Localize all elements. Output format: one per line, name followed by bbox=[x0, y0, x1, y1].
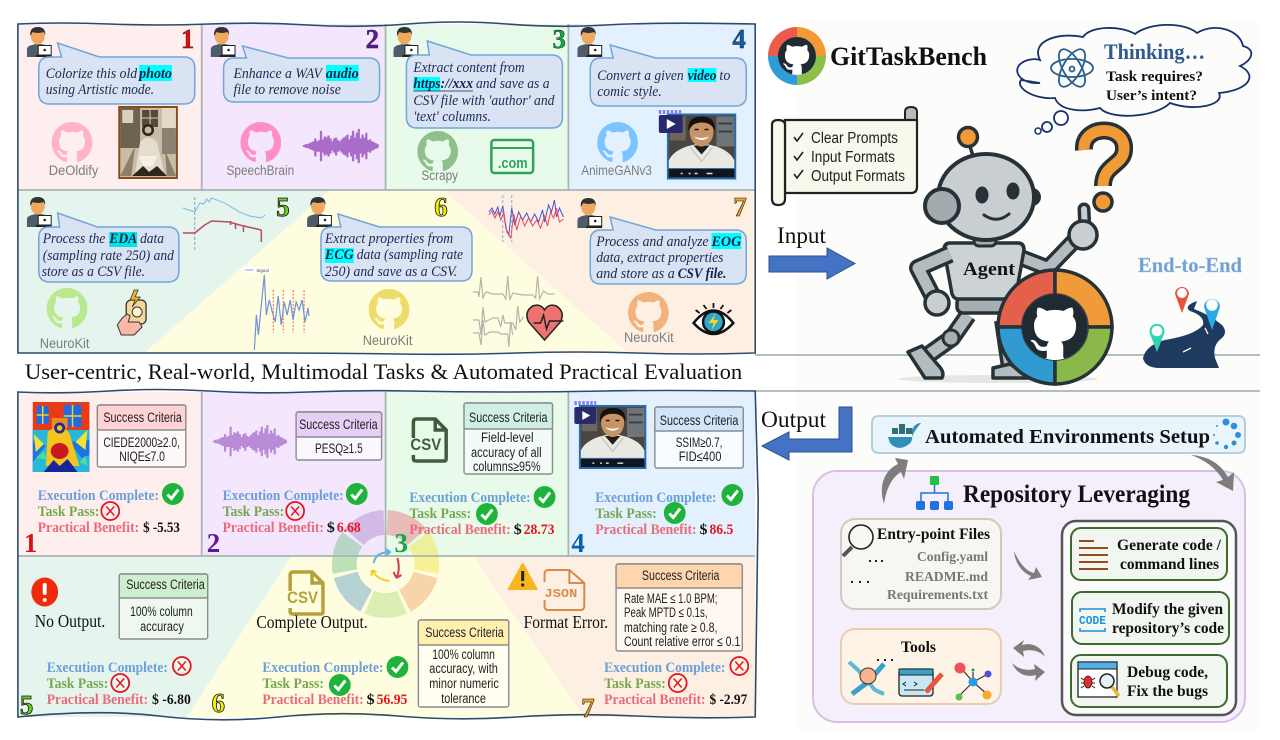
thought cloud bbox=[1017, 25, 1251, 134]
prompt bubble 4: Convert a given bbox=[597, 68, 684, 84]
number 7: 7 bbox=[581, 693, 595, 723]
prompt bubble 4 bbox=[590, 45, 746, 106]
number 5: 5 bbox=[276, 192, 290, 222]
success criteria box 6: accuracy, with bbox=[429, 661, 498, 676]
task 1 bbox=[27, 24, 195, 178]
prompt bubble 7: Process and analyze bbox=[595, 234, 709, 250]
success criteria box 6: 100% column bbox=[432, 647, 495, 662]
prompt bubble 1 bbox=[39, 43, 195, 104]
prompt bubble 5: (sampling rate 250) and bbox=[43, 248, 175, 264]
prompt bubble 3: https://xxx bbox=[413, 76, 473, 92]
scroll: prompt checklist bbox=[772, 107, 917, 205]
status lines 6: $ bbox=[367, 692, 375, 708]
success criteria box 1: NIQE≤7.0 bbox=[119, 449, 165, 464]
status lines 4 bbox=[595, 484, 743, 538]
output label: Output bbox=[761, 407, 827, 432]
end-to-end label: End-to-End bbox=[1138, 253, 1242, 277]
signal chart: Signal bbox=[256, 268, 269, 273]
prompt bubble 6 bbox=[321, 214, 472, 281]
result 5 bbox=[20, 574, 208, 720]
border bbox=[18, 390, 758, 720]
horizontal rule bbox=[755, 390, 1260, 392]
EDA chart bbox=[183, 197, 265, 252]
repo label: DeOldify bbox=[49, 163, 99, 178]
task 5 bbox=[27, 192, 290, 351]
icon: website: .com bbox=[498, 155, 528, 172]
number 4: 4 bbox=[732, 24, 746, 54]
prompt bubble 5: data bbox=[140, 231, 164, 247]
action: modify code: repository’s code bbox=[1112, 620, 1224, 637]
number 1: 1 bbox=[24, 528, 37, 558]
wheel with github logo bbox=[998, 270, 1112, 384]
icon: user bbox=[394, 27, 418, 57]
number 3: 3 bbox=[552, 24, 566, 54]
status lines 1 bbox=[38, 483, 184, 536]
prompt bubble 7 bbox=[590, 217, 746, 284]
status lines 5: Practical Benefit: bbox=[47, 692, 148, 708]
status lines 3: Execution Complete: bbox=[409, 490, 531, 506]
prompt bubble 2: audio bbox=[326, 66, 359, 82]
icon: DeOldify repo bbox=[52, 122, 92, 162]
success criteria box 3: accuracy of all bbox=[471, 445, 542, 460]
success criteria box 7: Success Criteria bbox=[642, 568, 720, 583]
result 6 bbox=[212, 572, 509, 718]
prompt bubble 3: 'text' columns. bbox=[413, 109, 491, 125]
icon: user bbox=[307, 197, 332, 227]
success criteria box 5: Success Criteria bbox=[126, 577, 205, 592]
scroll: prompt checklist: Output Formats bbox=[811, 168, 905, 185]
outcome label: Format Error. bbox=[524, 612, 608, 632]
outcome label: No Output. bbox=[35, 611, 105, 631]
icon: wrench hand bbox=[849, 662, 884, 694]
status lines 3: $ bbox=[514, 522, 522, 538]
success criteria box 3 bbox=[464, 403, 552, 474]
result 3 bbox=[394, 403, 555, 558]
background: right side bbox=[797, 22, 1260, 730]
success criteria box 7: Count relative error ≤ 0.1 bbox=[624, 634, 740, 649]
icon: JSON file bbox=[543, 570, 584, 610]
icon: user bbox=[27, 197, 52, 227]
repo label: AnimeGANv3 bbox=[581, 163, 652, 178]
success criteria box 4: SSIM≥0.7, bbox=[676, 435, 722, 450]
left column: tasks and evaluation bbox=[18, 22, 758, 723]
status lines 6 bbox=[262, 656, 408, 708]
number 2: 2 bbox=[366, 24, 379, 54]
EOG chart bbox=[489, 195, 563, 242]
repo label: Scrapy bbox=[421, 168, 458, 183]
old photo bbox=[119, 107, 177, 178]
action: debug code bbox=[1071, 655, 1227, 707]
status lines 5: Execution Complete: bbox=[47, 660, 168, 676]
input label: Input bbox=[777, 223, 827, 248]
prompt bubble 5: Process the bbox=[42, 231, 106, 247]
prompt bubble 3: Extract content from bbox=[412, 60, 525, 76]
panel: entry-point files: README.md bbox=[905, 570, 988, 585]
success criteria box 2: PESQ≥1.5 bbox=[315, 441, 363, 456]
status lines 4: Execution Complete: bbox=[595, 490, 716, 506]
heading text: Repository Leveraging bbox=[963, 481, 1190, 508]
status lines 4: Task Pass: bbox=[595, 506, 657, 522]
success criteria box 6: Success Criteria bbox=[425, 625, 504, 640]
status lines 6: Practical Benefit: bbox=[262, 692, 364, 708]
scroll: prompt checklist: Clear Prompts bbox=[811, 130, 898, 147]
name: GitTaskBench bbox=[830, 42, 988, 71]
status lines 1: $ -5.53 bbox=[143, 520, 180, 536]
status lines 7: $ -2.97 bbox=[710, 692, 748, 708]
task 3 bbox=[394, 24, 566, 183]
status lines 6: Task Pass: bbox=[262, 676, 324, 692]
prompt bubble 7: CSV file. bbox=[678, 266, 726, 282]
repo label: SpeechBrain bbox=[227, 163, 294, 178]
icon: network bbox=[954, 662, 992, 700]
icon: eye with bolt bbox=[694, 303, 733, 334]
prompt bubble 6: 250) and save as a CSV. bbox=[325, 264, 458, 280]
success criteria box 4: FID≤400 bbox=[679, 449, 721, 464]
panel: tools: Tools bbox=[901, 639, 936, 656]
success criteria box 3: Success Criteria bbox=[469, 410, 548, 425]
icon: website bbox=[491, 140, 533, 173]
panel: repository leveraging bbox=[813, 471, 1245, 722]
outcome label: Complete Output. bbox=[256, 612, 368, 632]
panel: entry-point files bbox=[841, 519, 1001, 609]
number 7: 7 bbox=[733, 192, 747, 222]
icon: Scrapy repo bbox=[417, 131, 458, 171]
action: debug code: Fix the bugs bbox=[1127, 683, 1208, 700]
status lines 4: Practical Benefit: bbox=[595, 522, 697, 538]
prompt bubble 2: Enhance a WAV bbox=[233, 66, 324, 82]
success criteria box 7: matching rate ≥ 0.8, bbox=[624, 620, 717, 635]
task 2 bbox=[211, 24, 380, 178]
status lines 5: Task Pass: bbox=[47, 676, 108, 692]
logo and project name bbox=[768, 27, 988, 85]
icon: SpeechBrain repo bbox=[240, 122, 281, 162]
icon: user bbox=[577, 27, 602, 57]
status lines 4: $ bbox=[700, 522, 708, 538]
icon: code window bbox=[899, 669, 942, 696]
status lines 3: Task Pass: bbox=[409, 506, 471, 522]
evaluation dividers bbox=[18, 392, 755, 556]
prompt bubble 5: EDA bbox=[108, 231, 137, 247]
status lines 3 bbox=[409, 486, 555, 538]
prompt bubble 5 bbox=[39, 213, 179, 282]
status lines 7: Practical Benefit: bbox=[604, 692, 706, 708]
success criteria box 4: Success Criteria bbox=[660, 413, 739, 428]
status lines 5 bbox=[47, 657, 191, 708]
panel: agent actions bbox=[1062, 521, 1236, 715]
action: modify code: Modify the given bbox=[1112, 601, 1223, 618]
status lines 2: Execution Complete: bbox=[223, 488, 344, 504]
question mark bbox=[1084, 130, 1124, 211]
success criteria box 1: CIEDE2000≥2.0, bbox=[103, 435, 180, 450]
icon: user bbox=[211, 27, 236, 57]
neck bbox=[974, 236, 996, 246]
prompt bubble 3: and save as a bbox=[476, 76, 550, 92]
prompt bubble 7: EOG bbox=[711, 234, 742, 250]
input video bbox=[659, 112, 736, 180]
repo label: NeuroKit bbox=[40, 336, 90, 351]
number 3: 3 bbox=[394, 528, 408, 558]
icon: docker whale bbox=[888, 423, 921, 448]
panel: evaluation bbox=[18, 392, 755, 717]
success criteria box 6 bbox=[418, 620, 509, 707]
horizontal rule bbox=[755, 354, 1260, 356]
action: modify code bbox=[1072, 592, 1229, 644]
status lines 5: $ -6.80 bbox=[152, 692, 191, 708]
success criteria box 6: tolerance bbox=[441, 691, 486, 706]
success criteria box 1 bbox=[97, 405, 186, 467]
signal chart bbox=[243, 267, 309, 350]
prompt bubble 7: data, extract properties bbox=[596, 250, 724, 266]
status lines 2: Practical Benefit: bbox=[223, 520, 324, 536]
number 1: 1 bbox=[181, 24, 194, 54]
thinking text: Thinking… bbox=[1104, 39, 1205, 64]
number 5: 5 bbox=[20, 690, 33, 720]
thought cloud: User’s intent? bbox=[1106, 88, 1197, 104]
legs bbox=[908, 315, 1030, 378]
success criteria box 7: Peak MPTD ≤ 0.1s, bbox=[624, 605, 708, 620]
arrow: input bbox=[769, 248, 855, 279]
success criteria box 2: Success Criteria bbox=[299, 417, 378, 432]
left arm bbox=[918, 254, 950, 315]
number 2: 2 bbox=[207, 528, 220, 558]
prompt bubble 5: store as a CSV file. bbox=[42, 264, 145, 280]
icon: CSV file bbox=[410, 419, 446, 461]
panel: tools bbox=[841, 629, 1001, 704]
status lines 2: Task Pass: bbox=[223, 504, 284, 520]
waist bbox=[957, 297, 1007, 313]
number 6: 6 bbox=[212, 688, 225, 718]
prompt bubble 3: CSV file with 'author' and bbox=[413, 93, 555, 109]
task 7 bbox=[489, 192, 747, 345]
panel: entry-point files: Config.yaml bbox=[917, 550, 988, 565]
agent label: Agent bbox=[963, 259, 1016, 280]
scroll: prompt checklist: Input Formats bbox=[811, 149, 895, 166]
number 6: 6 bbox=[434, 192, 448, 222]
prompt bubble 2 bbox=[224, 46, 380, 102]
status lines 7 bbox=[604, 657, 748, 708]
action: debug code: Debug code, bbox=[1127, 664, 1208, 681]
icon: magnifier bbox=[843, 525, 873, 556]
status lines 3: Practical Benefit: bbox=[409, 522, 511, 538]
icon: NeuroKit repo bbox=[369, 289, 409, 329]
icon: heart bbox=[527, 305, 563, 340]
result 2 bbox=[207, 412, 382, 558]
icon: JSON file: JSON bbox=[545, 587, 577, 601]
icon: user bbox=[577, 198, 602, 228]
icon: sync arrows bbox=[1012, 640, 1045, 681]
prompt bubble 6: ECG bbox=[324, 247, 354, 263]
title: section heading: User-centric, Real-world, Multimodal Tasks & Automated Practical Evaluation bbox=[25, 359, 742, 384]
status lines 1: Task Pass: bbox=[38, 504, 99, 520]
action: generate code: Generate code / bbox=[1117, 537, 1222, 554]
icon: touch sensor bbox=[117, 290, 146, 335]
prompt bubble 7: and store as a bbox=[596, 266, 675, 282]
repository heading bbox=[916, 476, 1190, 510]
repo label: NeuroKit bbox=[624, 330, 674, 345]
status lines 3: 28.73 bbox=[524, 522, 554, 538]
arrow: leverage to setup bbox=[882, 458, 908, 504]
chart: seven-segment ring bbox=[332, 510, 439, 618]
repo label: NeuroKit bbox=[363, 333, 413, 348]
action: generate code: command lines bbox=[1120, 556, 1219, 573]
prompt bubble 2: file to remove noise bbox=[234, 82, 341, 98]
success criteria box 1: Success Criteria bbox=[103, 410, 182, 425]
status lines 1: Execution Complete: bbox=[38, 488, 159, 504]
prompt bubble 1: using Artistic mode. bbox=[46, 82, 154, 98]
success criteria box 5: 100% column bbox=[130, 604, 193, 619]
prompt bubble 1: Colorize this old bbox=[46, 66, 138, 82]
prompt bubble 4: comic style. bbox=[597, 84, 662, 100]
right arm bbox=[1022, 209, 1097, 268]
success criteria box 5 bbox=[119, 574, 208, 639]
status lines 6: 56.95 bbox=[377, 692, 407, 708]
success criteria box 7: Rate MAE ≤ 1.0 BPM; bbox=[624, 591, 717, 606]
head bbox=[925, 154, 1041, 240]
icon: tree bbox=[916, 476, 953, 510]
success criteria box 3: Field-level bbox=[481, 430, 534, 445]
icon: AnimeGANv3 repo bbox=[597, 122, 638, 162]
arrow: files to actions bbox=[1014, 551, 1042, 580]
prompt bubble 4: to bbox=[719, 68, 730, 84]
icon: spinner bbox=[1213, 418, 1241, 449]
status lines 7: Task Pass: bbox=[604, 676, 666, 692]
result 1 bbox=[24, 402, 186, 558]
prompt bubble 3 bbox=[406, 41, 562, 128]
status lines 1: Practical Benefit: bbox=[38, 520, 139, 536]
antenna bbox=[958, 128, 978, 156]
success criteria box 4 bbox=[655, 407, 743, 468]
icon: winding road with pins bbox=[1143, 287, 1225, 368]
action: generate code bbox=[1071, 528, 1227, 580]
torso bbox=[944, 243, 1024, 299]
ECG traces bbox=[473, 276, 554, 347]
heatmap photo bbox=[33, 402, 89, 472]
icon: warning bbox=[509, 564, 537, 589]
shadow bbox=[898, 375, 1098, 383]
arrow: setup to leverage bbox=[1191, 455, 1234, 491]
prompt bubble 4: video bbox=[688, 68, 716, 84]
thought cloud: Task requires? bbox=[1106, 69, 1203, 85]
result 7 bbox=[509, 564, 748, 723]
setup text: Automated Environments Setup bbox=[925, 426, 1210, 448]
icon: CSV file bbox=[287, 572, 323, 614]
prompt bubble 1: photo bbox=[137, 66, 172, 82]
icon: NeuroKit repo bbox=[47, 288, 87, 328]
success criteria box 5: accuracy bbox=[140, 619, 184, 634]
icon: user bbox=[27, 27, 52, 57]
success criteria box 3: columns≥95% bbox=[473, 459, 541, 474]
success criteria box 2 bbox=[296, 412, 382, 460]
arrow: output bbox=[762, 407, 852, 460]
logo ring bbox=[768, 27, 826, 85]
number 4: 4 bbox=[571, 528, 585, 558]
icon: no output alert bbox=[31, 578, 58, 606]
panel: entry-point files: Entry-point Files bbox=[877, 526, 990, 543]
success criteria box 7 bbox=[616, 564, 742, 651]
status lines 4: 86.5 bbox=[710, 522, 733, 538]
task 4 bbox=[577, 24, 746, 179]
task 6 bbox=[243, 192, 563, 350]
icon: NeuroKit repo bbox=[628, 292, 669, 332]
result 4 bbox=[571, 403, 743, 558]
action: modify code: CODE bbox=[1079, 614, 1106, 628]
icon: atom bbox=[1051, 45, 1093, 91]
panel: entry-point files: Requirements.txt bbox=[887, 588, 988, 603]
enhanced waveform bbox=[214, 425, 286, 458]
success criteria box 6: minor numeric bbox=[429, 676, 499, 691]
status lines 2: 6.68 bbox=[337, 520, 361, 536]
comic video bbox=[574, 403, 646, 469]
prompt bubble 6: data (sampling rate bbox=[357, 247, 464, 263]
robot agent bbox=[898, 128, 1124, 384]
prompt bubble 6: Extract properties from bbox=[324, 231, 453, 247]
status lines 7: Execution Complete: bbox=[604, 660, 725, 676]
status lines 2: $ bbox=[327, 520, 335, 536]
panel: input tasks bbox=[18, 22, 755, 354]
icon: cycle arrows bbox=[372, 549, 401, 581]
audio waveform bbox=[304, 129, 378, 163]
status lines 2 bbox=[223, 483, 368, 536]
status lines 6: Execution Complete: bbox=[262, 660, 384, 676]
panel: environment setup bbox=[872, 416, 1245, 453]
